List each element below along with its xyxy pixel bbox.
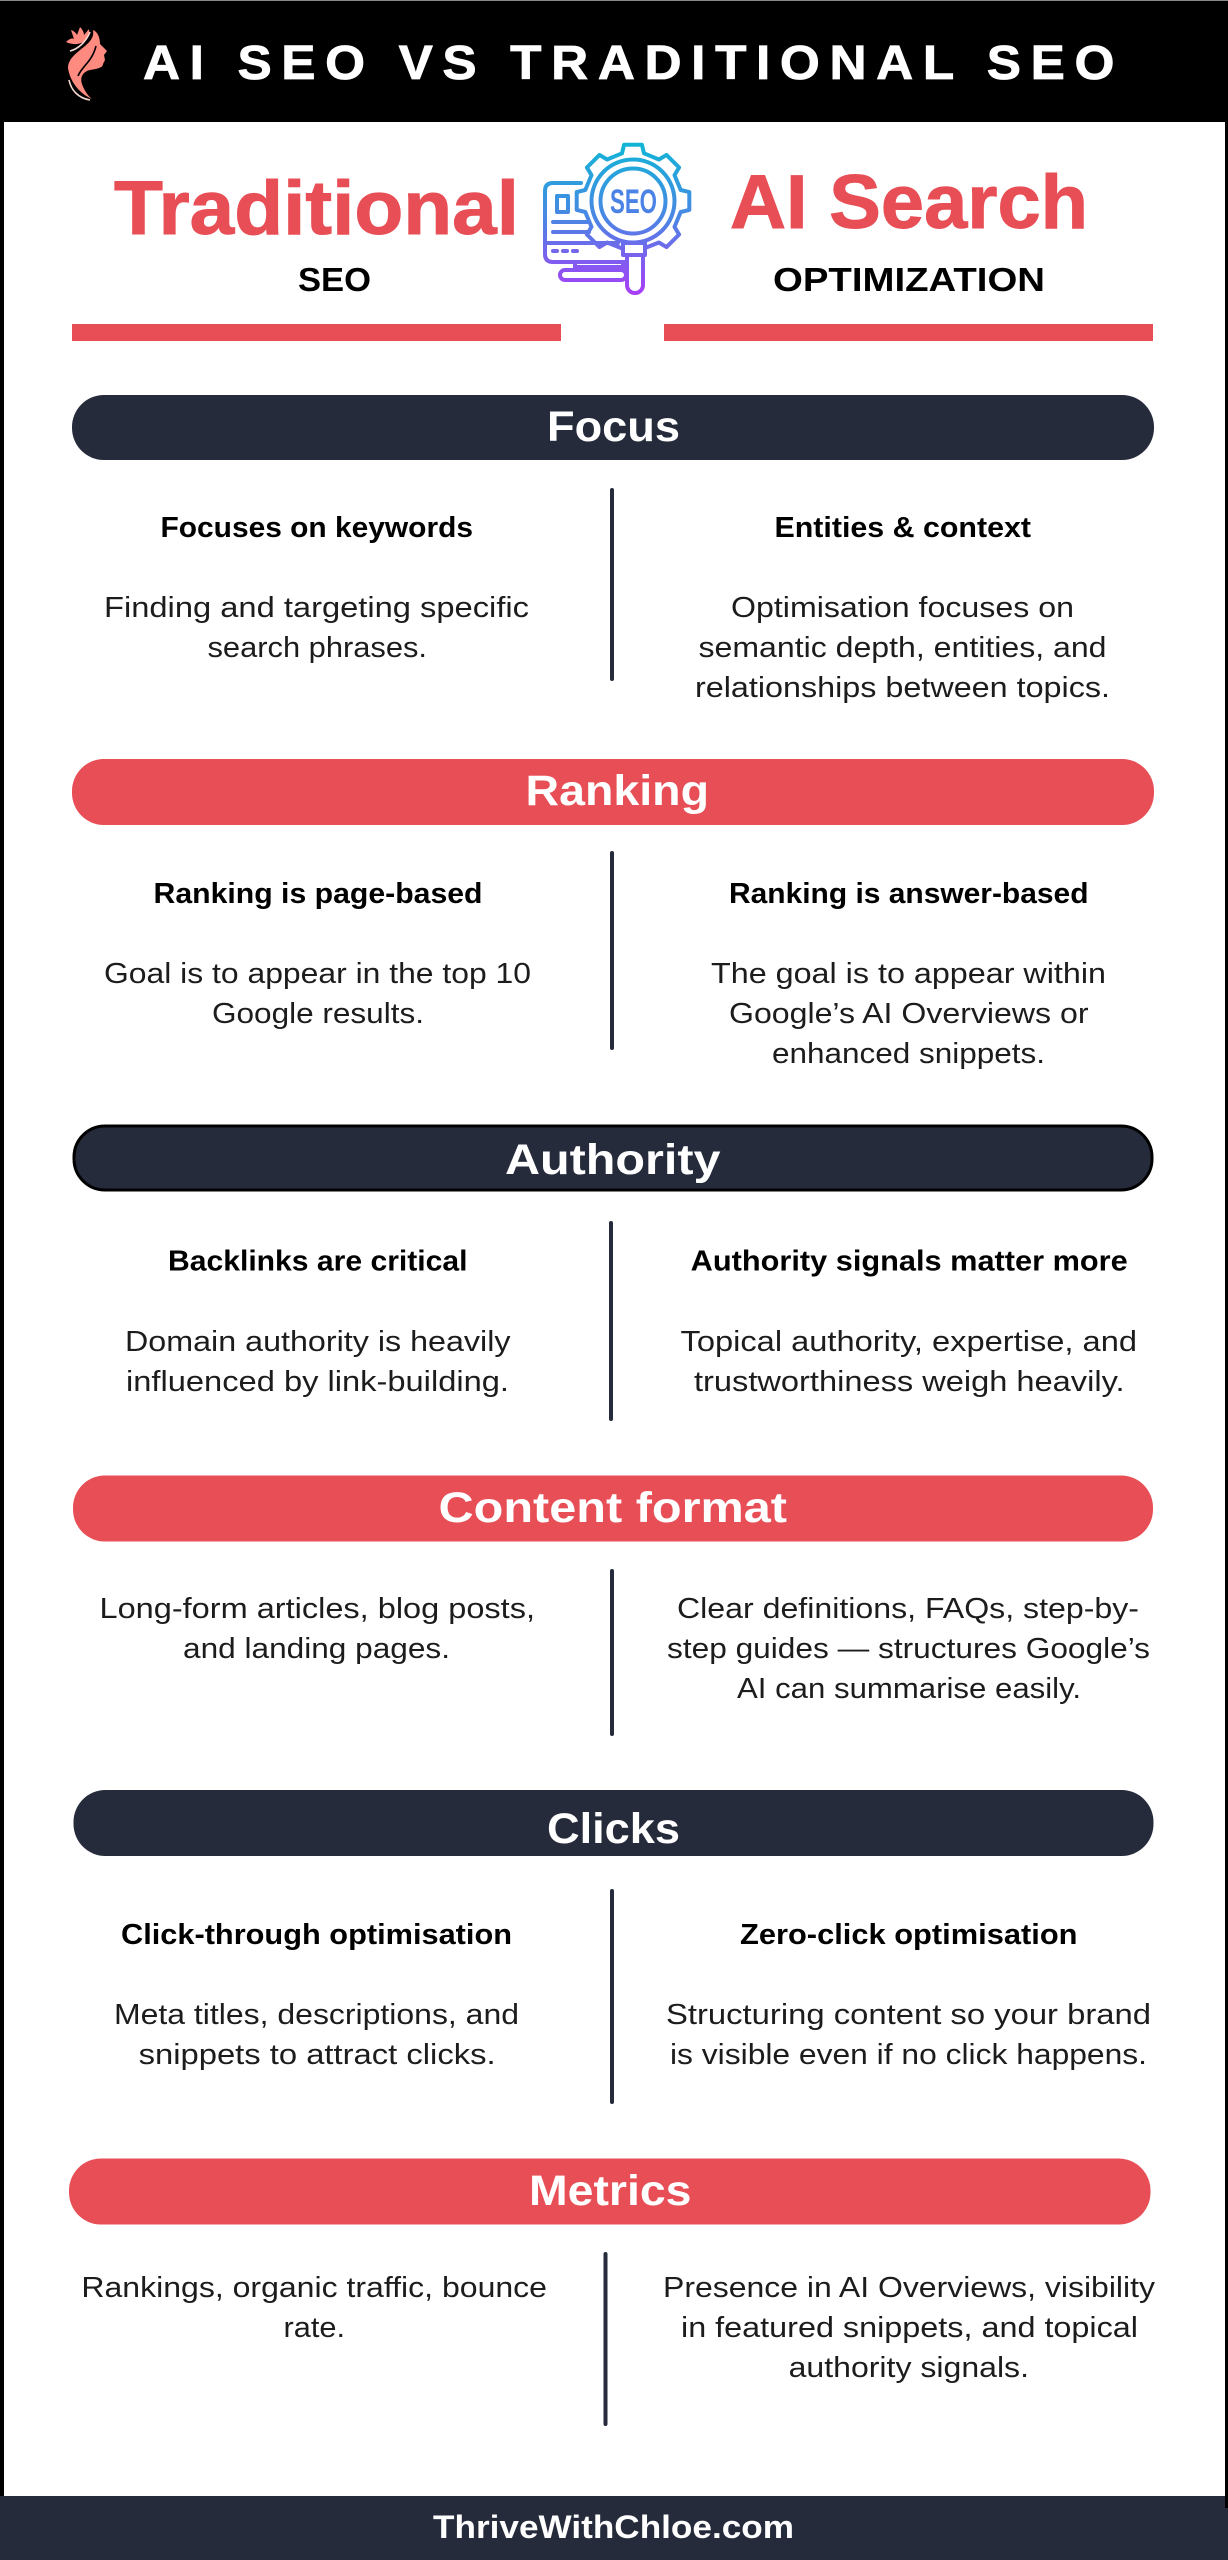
pill heading: Authority bbox=[74, 1126, 1152, 1190]
pill heading: Metrics bbox=[69, 2158, 1150, 2224]
left heading: Traditional SEO bbox=[72, 166, 561, 341]
left column: page-based: Google results. bbox=[212, 998, 424, 1030]
right column: answer-based: Ranking is answer-based bbox=[729, 878, 1088, 910]
right column: zero-click: Structuring content so your brand bbox=[666, 1999, 1151, 2031]
left column: click-through bbox=[114, 1919, 519, 2071]
divider bbox=[610, 1889, 614, 2104]
left column: long-form: Long-form articles, blog posts, bbox=[100, 1593, 535, 1625]
pill heading: Content format bbox=[73, 1476, 1153, 1542]
left column: page-based bbox=[104, 878, 531, 1030]
right column: answer-based: The goal is to appear within bbox=[711, 958, 1106, 990]
divider bbox=[604, 2252, 608, 2426]
right column: authority signals: trustworthiness weigh heavily. bbox=[694, 1366, 1124, 1398]
right column: zero-click bbox=[666, 1919, 1151, 2071]
section: Ranking bbox=[72, 759, 1154, 1070]
right column: answer-based: Google’s AI Overviews or bbox=[729, 998, 1089, 1030]
right heading: AI Search Optimization bbox=[664, 160, 1153, 341]
right column: structured content: Clear definitions, FAQs, step-by- bbox=[677, 1593, 1139, 1625]
icon: SEO magnifier, gear and monitor: SEO bbox=[610, 183, 657, 221]
right column: AI metrics: Presence in AI Overviews, visibility bbox=[663, 2272, 1156, 2304]
section: Authority bbox=[74, 1126, 1152, 1421]
left column: keywords: Finding and targeting specific bbox=[104, 592, 529, 624]
right heading: AI Search Optimization: OPTIMIZATION bbox=[773, 261, 1045, 298]
left column: page-based: Goal is to appear in the top 10 bbox=[104, 958, 531, 990]
left heading: Traditional SEO: Traditional bbox=[114, 166, 519, 251]
left column: page-based: Ranking is page-based bbox=[154, 878, 482, 910]
left column: backlinks: influenced by link-building. bbox=[126, 1366, 509, 1398]
left column: click-through: Meta titles, descriptions, and bbox=[114, 1999, 519, 2031]
main title: AI SEO VS TRADITIONAL SEO bbox=[143, 37, 1124, 90]
right column: entities: semantic depth, entities, and bbox=[698, 632, 1106, 664]
left column: keywords: Focuses on keywords bbox=[160, 512, 473, 544]
right column: entities: Optimisation focuses on bbox=[731, 592, 1074, 624]
left column: long-form bbox=[100, 1593, 535, 1665]
pill heading: Metrics: Metrics bbox=[529, 2167, 692, 2215]
pill heading: Clicks: Clicks bbox=[547, 1805, 680, 1853]
pill heading: Ranking: Ranking bbox=[526, 767, 709, 815]
pill heading: Clicks bbox=[74, 1790, 1154, 1856]
left column: backlinks: Backlinks are critical bbox=[168, 1246, 468, 1278]
header logo: woman profile bbox=[66, 27, 107, 100]
right column: answer-based bbox=[711, 878, 1106, 1070]
left column: keywords: search phrases. bbox=[208, 632, 427, 664]
section: Metrics bbox=[69, 2158, 1156, 2426]
right column: authority signals bbox=[680, 1246, 1137, 1398]
right column: entities: Entities & context bbox=[774, 512, 1031, 544]
right column: entities: relationships between topics. bbox=[695, 672, 1110, 704]
left column: click-through: snippets to attract clicks. bbox=[139, 2039, 496, 2071]
divider bbox=[610, 851, 614, 1050]
column headings bbox=[72, 145, 1153, 341]
left column: long-form: and landing pages. bbox=[183, 1633, 450, 1665]
divider bbox=[610, 488, 614, 681]
section: Clicks bbox=[74, 1790, 1154, 2104]
right column: authority signals: Topical authority, expertise, and bbox=[680, 1326, 1137, 1358]
left column: keywords bbox=[104, 512, 529, 664]
left column: click-through: Click-through optimisation bbox=[121, 1919, 512, 1951]
section: Focus bbox=[72, 395, 1154, 704]
pill heading: Authority: Authority bbox=[505, 1136, 721, 1184]
right column: entities bbox=[695, 512, 1110, 704]
left column: traditional metrics bbox=[81, 2272, 547, 2344]
left column: traditional metrics: rate. bbox=[284, 2312, 345, 2344]
pill heading: Content format: Content format bbox=[438, 1484, 787, 1532]
right heading: AI Search Optimization: AI Search bbox=[730, 160, 1088, 245]
divider bbox=[609, 1221, 613, 1421]
pill heading: Focus bbox=[72, 395, 1154, 460]
section: Content format bbox=[73, 1476, 1153, 1736]
right column: AI metrics: in featured snippets, and topical bbox=[681, 2312, 1138, 2344]
pill heading: Focus: Focus bbox=[547, 403, 680, 451]
right column: structured content: AI can summarise easily. bbox=[737, 1673, 1081, 1705]
right column: zero-click: Zero-click optimisation bbox=[740, 1919, 1078, 1951]
right column: answer-based: enhanced snippets. bbox=[772, 1038, 1045, 1070]
icon: SEO magnifier, gear and monitor bbox=[545, 145, 689, 293]
header banner bbox=[66, 27, 1124, 100]
right column: authority signals: Authority signals matter more bbox=[691, 1246, 1128, 1278]
footer website text: ThriveWithChloe.com bbox=[433, 2509, 794, 2545]
right column: AI metrics bbox=[663, 2272, 1156, 2384]
left column: backlinks bbox=[125, 1246, 511, 1398]
footer bbox=[0, 2496, 1228, 2560]
left heading: Traditional SEO: SEO bbox=[298, 261, 371, 298]
pill heading: Ranking bbox=[72, 759, 1154, 825]
right column: structured content: step guides — structures Google’s bbox=[667, 1633, 1150, 1665]
left column: traditional metrics: Rankings, organic traffic, bounce bbox=[81, 2272, 547, 2304]
right column: AI metrics: authority signals. bbox=[789, 2352, 1029, 2384]
divider bbox=[610, 1569, 614, 1736]
right column: zero-click: is visible even if no click happens. bbox=[670, 2039, 1147, 2071]
left column: backlinks: Domain authority is heavily bbox=[125, 1326, 511, 1358]
right column: structured content bbox=[667, 1593, 1150, 1705]
